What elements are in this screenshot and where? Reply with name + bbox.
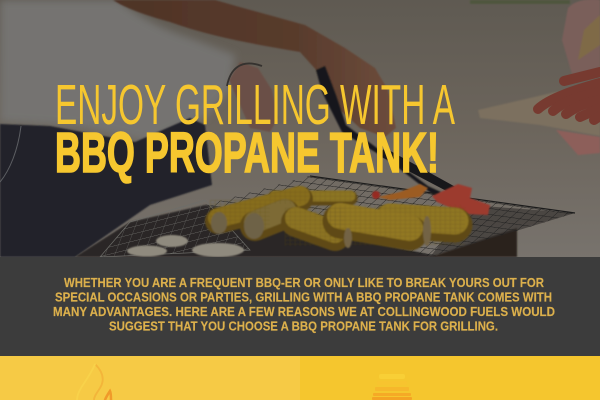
white shirt [0,0,235,142]
wire grill outline [310,176,575,213]
second hand and wrist [229,62,278,132]
right hand and forearm [562,0,600,74]
cloth under board [556,130,600,155]
introduction text: SPECIAL OCCASIONS OR PARTIES, GRILLING WITH A BBQ PROPANE TANK COMES WITH [55,290,552,304]
panel: left reason [0,356,300,400]
dark grill right side [430,205,575,257]
title [55,73,455,185]
tongs second prong [378,148,461,196]
wooden board [478,90,600,136]
kernel texture [210,190,465,246]
introduction text: MANY ADVANTAGES. HERE ARE A FEW REASONS WE AT COLLINGWOOD FUELS WOULD [53,305,555,319]
wire grill back [205,176,575,257]
panel: right reason [300,356,600,400]
tongs [316,66,441,197]
raised arm and hand [113,0,396,137]
introduction text: WHETHER YOU ARE A FREQUENT BBQ-ER OR ONLY LIKE TO BREAK YOURS OUT FOR [64,276,544,290]
sausages [538,72,600,120]
dark shorts [0,118,212,257]
corn ends [211,212,227,234]
background foliage strip [470,0,570,4]
peppers [372,184,490,215]
introduction text [53,276,555,334]
charcoal pieces [127,235,244,257]
charcoal bed under grill [75,205,440,257]
panel: introduction [0,257,600,356]
introduction text: SUGGEST THAT YOU CHOOSE A BBQ PROPANE TANK FOR GRILLING. [109,320,498,334]
icon: stacked burger [372,374,412,400]
grill box [430,228,517,257]
highlight on hand [578,15,600,60]
icon: flame [77,364,111,400]
shorts seam [0,126,21,182]
corn cobs [210,190,465,248]
wire grill front left [100,200,250,257]
hero photo: barbecue scene [0,0,600,258]
wristband [227,63,262,86]
